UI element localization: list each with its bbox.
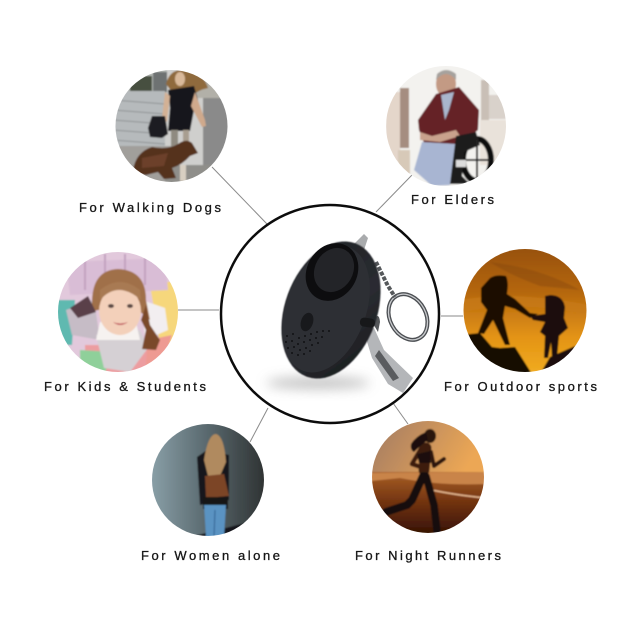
infographic: personal alarm use cases — [44, 66, 597, 563]
label: For Outdoor sports — [444, 379, 598, 394]
photo: elderly man in wheelchair — [384, 64, 510, 188]
label: For Women alone — [141, 548, 280, 563]
ring outline — [221, 205, 439, 423]
alarm body — [263, 228, 399, 392]
connector lines — [178, 167, 463, 442]
label: For Elders — [411, 192, 494, 207]
panel: for elders — [384, 64, 510, 207]
photo: hikers silhouettes at sunset — [464, 249, 586, 372]
speaker holes — [285, 330, 330, 356]
label: For Night Runners — [355, 548, 502, 563]
metal top loop — [354, 234, 368, 250]
panel: for kids & students — [44, 251, 206, 394]
panel: for outdoor sports — [444, 246, 598, 394]
photo: woman walking a dog — [113, 68, 231, 185]
panel: for walking dogs — [79, 68, 231, 215]
panel: for night runners — [355, 420, 502, 563]
small button — [298, 311, 316, 333]
photo: smiling girl with backpack — [56, 251, 180, 373]
metal clip — [364, 316, 413, 393]
label: For Kids & Students — [44, 379, 206, 394]
runner figure — [386, 429, 444, 531]
panic button — [295, 234, 369, 310]
photo: woman from behind by concrete wall — [150, 423, 266, 537]
side pin — [359, 317, 375, 328]
photo: woman running on beach at sunset — [371, 420, 486, 534]
central panel: alarm keychain in ring — [221, 205, 439, 423]
device shadow — [266, 377, 370, 389]
label: For Walking Dogs — [79, 200, 222, 215]
keyring and chain — [376, 262, 435, 347]
panel: for women alone — [141, 423, 280, 563]
